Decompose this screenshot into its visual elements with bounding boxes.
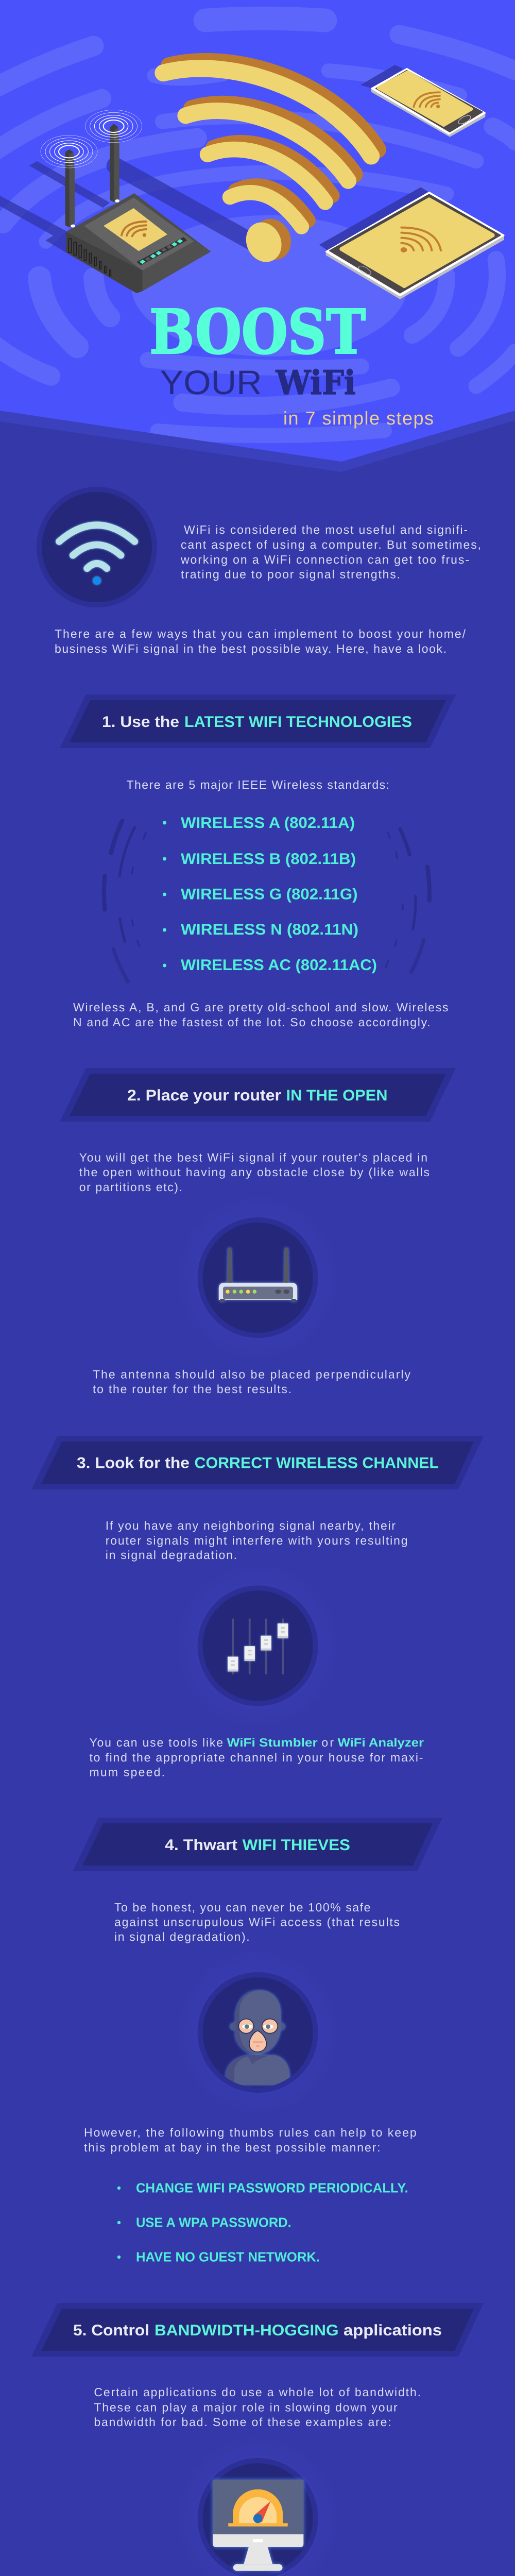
intro text: WiFi is considered the most useful and signifi- — [184, 523, 468, 536]
list: security rules — [117, 2180, 408, 2265]
text: standards conclusion: Wireless A, B, and G are pretty old-school and slow. Wireless — [73, 1001, 449, 1014]
text: antenna placement: The antenna should also be placed perpendicularly — [93, 1367, 411, 1381]
intro text: ways to boost: business WiFi signal in the best possible way. Here, have a look. — [55, 642, 447, 655]
icon: masked thief — [198, 1972, 318, 2093]
intro text: working on a WiFi connection can get too frus- — [180, 553, 469, 566]
tagline: in 7 simple steps — [283, 408, 434, 429]
heading: step 3: CORRECT WIRELESS CHANNEL — [195, 1455, 439, 1471]
list: security rules: CHANGE WIFI PASSWORD PERIODICALLY. — [136, 2180, 408, 2196]
intro text: ways to boost — [55, 627, 466, 655]
icon: monitor with speedometer — [173, 2433, 343, 2576]
header background with signal waves — [0, 0, 515, 515]
text: never fully safe: against unscrupulous WiFi access (that results — [114, 1916, 400, 1929]
list: wireless standards: WIRELESS B (802.11B) — [181, 851, 356, 868]
list: security rules: USE A WPA PASSWORD. — [136, 2215, 291, 2230]
text: thumb rules intro — [84, 2126, 417, 2154]
heading: step 5: BANDWIDTH-HOGGING — [154, 2322, 339, 2339]
subtitle: YOUR WiFi: WiFi — [276, 364, 356, 402]
text: bandwidth hogs: Certain applications do use a whole lot of bandwidth. — [94, 2385, 421, 2399]
subtitle: YOUR WiFi — [160, 363, 356, 402]
heading: step 3 — [31, 1436, 484, 1489]
text: antenna placement — [93, 1367, 411, 1396]
list: wireless standards — [163, 815, 377, 974]
illustration: large 3D wifi symbol — [163, 61, 377, 268]
text: standards conclusion — [73, 1001, 449, 1029]
heading: step 4: WIFI THIEVES — [243, 1837, 350, 1854]
text: bandwidth hogs: These can play a major role in slowing down your — [94, 2401, 398, 2414]
text: neighboring signals: If you have any neighboring signal nearby, their — [106, 1519, 396, 1532]
text: router in the open — [79, 1151, 430, 1194]
icon: intro wifi circle — [37, 487, 157, 607]
text: analyzer tools: You can use tools like — [90, 1736, 223, 1749]
text: analyzer tools: mum speed. — [90, 1766, 165, 1779]
decorative signal arcs around list — [104, 821, 430, 982]
text: standards conclusion: N and AC are the fastest of the lot. So choose accordingly. — [73, 1015, 431, 1029]
intro text: ways to boost: There are a few ways that you can implement to boost your home/ — [55, 627, 466, 640]
intro text: cant aspect of using a computer. But sometimes, — [181, 538, 481, 551]
text: analyzer tools: to find the appropriate channel in your house for maxi- — [90, 1751, 423, 1764]
icon: wireless router — [173, 1193, 343, 1363]
text: never fully safe: in signal degradation). — [114, 1930, 250, 1943]
heading: step 4 — [73, 1818, 442, 1871]
text: thumb rules intro: However, the following thumbs rules can help to keep — [84, 2126, 417, 2139]
heading: step 5 — [31, 2303, 484, 2357]
list: wireless standards: WIRELESS G (802.11G) — [181, 886, 357, 903]
text: analyzer tools — [90, 1736, 424, 1779]
heading: step 2: IN THE OPEN — [286, 1087, 387, 1104]
illustration: tablet — [319, 187, 504, 299]
list: wireless standards: WIRELESS AC (802.11AC) — [181, 957, 377, 974]
intro text — [180, 523, 481, 581]
text: router in the open: the open without having any obstacle close by (like walls — [79, 1165, 430, 1179]
heading: step 2 — [60, 1068, 456, 1122]
heading: step 2: 2. Place your router — [127, 1087, 281, 1104]
heading: step 4: 4. Thwart — [165, 1837, 237, 1854]
heading: step 1: LATEST WIFI TECHNOLOGIES — [184, 714, 412, 731]
illustration: smartphone — [360, 65, 485, 137]
heading: step 1 — [60, 694, 456, 748]
list: wireless standards: WIRELESS A (802.11A) — [181, 815, 355, 832]
intro text: trating due to poor signal strengths. — [181, 568, 400, 581]
text: thumb rules intro: this problem at bay in the best possible manner: — [84, 2141, 380, 2154]
text: neighboring signals: router signals might interfere with yours resulting — [106, 1534, 407, 1547]
list: security rules: HAVE NO GUEST NETWORK. — [136, 2249, 320, 2265]
list: wireless standards: WIRELESS N (802.11N) — [181, 921, 358, 938]
text: router in the open: You will get the best WiFi signal if your router's placed in — [79, 1151, 427, 1164]
heading: step 1: 1. Use the — [102, 714, 179, 731]
text: analyzer tools: WiFi Stumbler — [227, 1736, 318, 1749]
subtitle: YOUR WiFi: YOUR — [160, 363, 262, 401]
illustration: isometric router — [0, 110, 252, 293]
text: never fully safe: To be honest, you can never be 100% safe — [114, 1901, 370, 1914]
heading: step 3: 3. Look for the — [77, 1455, 190, 1471]
text: analyzer tools: WiFi Analyzer — [338, 1736, 424, 1749]
heading: step 5: 5. Control — [73, 2322, 149, 2339]
title: BOOST: BOOST — [149, 296, 366, 368]
text: router in the open: or partitions etc). — [79, 1180, 182, 1194]
text: neighboring signals — [106, 1519, 407, 1562]
text: neighboring signals: in signal degradation. — [106, 1548, 237, 1562]
text: bandwidth hogs: bandwidth for bad. Some of these examples are: — [94, 2415, 391, 2429]
icon: channel sliders — [173, 1561, 343, 1731]
text: analyzer tools: or — [321, 1736, 334, 1749]
text: standards intro: There are 5 major IEEE Wireless standards: — [127, 778, 389, 791]
text: never fully safe — [114, 1901, 400, 1943]
text: bandwidth hogs — [94, 2385, 421, 2429]
text: antenna placement: to the router for the best results. — [93, 1382, 291, 1396]
heading: step 5: applications — [344, 2322, 442, 2339]
